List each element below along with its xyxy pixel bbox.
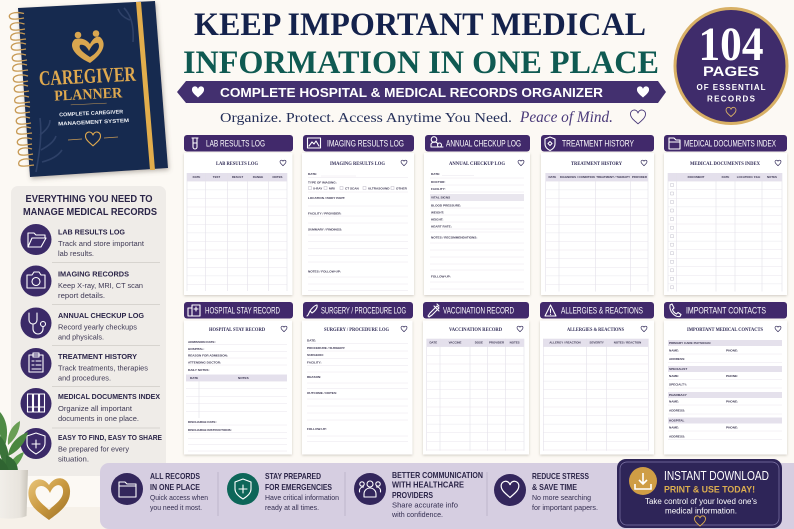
- form: FOLLOW-UP:: [431, 274, 451, 278]
- table: DIAGNOSIS / CONDITION: [560, 175, 595, 179]
- benefit: better communication: with confidence.: [391, 510, 443, 519]
- panel: treatment history: TREATMENT HISTORY: [571, 161, 622, 167]
- table: DATE: [429, 341, 437, 345]
- contact sections: PHONE:: [726, 400, 738, 404]
- icon: cover heart: [68, 132, 118, 146]
- item: medical documents index: documents in one place.: [58, 416, 139, 423]
- plant pot: [0, 470, 28, 519]
- table: RESULT: [232, 175, 243, 179]
- plant: [0, 412, 28, 519]
- panel heading: EVERYTHING YOU NEED TO: [26, 194, 153, 205]
- icon: scalpel: [307, 305, 317, 316]
- panel: allergies and reactions: ALLERGIES & REACTIONS: [561, 306, 643, 316]
- panel heading: [23, 194, 157, 218]
- benefit: all records: Quick access when: [150, 493, 208, 502]
- contact sections: NAME:: [669, 348, 679, 352]
- icon: phone: [670, 304, 681, 317]
- elastic band: [136, 2, 155, 170]
- form: [186, 340, 287, 451]
- form: OTHER: [396, 186, 408, 190]
- bottom benefits band: [100, 463, 794, 529]
- table: SEVERITY: [590, 341, 604, 345]
- form: BLOOD PRESSURE:: [431, 204, 461, 208]
- panel: annual checkup log: ANNUAL CHECKUP LOG: [446, 138, 521, 150]
- panel: treatment history: TREATMENT HISTORY: [562, 138, 634, 150]
- item: medical documents index: Organize all important: [58, 406, 132, 413]
- benefit: stay prepared: ready at all times.: [265, 503, 319, 512]
- table: ALLERGY / REACTION: [549, 341, 581, 345]
- badge: 104 pages: RECORDS: [707, 94, 756, 104]
- planner book: [9, 1, 168, 177]
- contact sections: PHONE:: [726, 348, 738, 352]
- form: [307, 338, 408, 442]
- panel: imaging results log: IMAGING RESULTS LOG: [330, 161, 386, 167]
- table: RANGE: [253, 175, 263, 179]
- panel: treatment history: [541, 135, 654, 295]
- panel: imaging results log: IMAGING RESULTS LOG: [327, 138, 404, 150]
- table: DATE: [722, 175, 729, 179]
- contact sections: PRIMARY CARE PHYSICIAN: [669, 341, 711, 345]
- form: [430, 172, 524, 289]
- panel: medical documents index: [664, 135, 787, 295]
- form: DISCHARGE DATE:: [188, 420, 217, 424]
- form: X-RAY: [313, 186, 323, 190]
- item: lab results log: Track and store important: [58, 241, 144, 248]
- benefit: reduce stress: REDUCE STRESS: [532, 472, 589, 481]
- item: easy to find: EASY TO FIND, EASY TO SHARE: [58, 433, 162, 442]
- form: DATE:: [308, 172, 317, 176]
- form: LOCATION / BODY PART:: [308, 196, 345, 200]
- icon: shield: [545, 137, 555, 150]
- title: [183, 7, 659, 81]
- table: LOCATION / FILE: [737, 175, 760, 179]
- panel: allergies and reactions: [540, 302, 654, 454]
- contact sections: ADDRESS:: [669, 434, 685, 438]
- instant download callout: Take control of your loved one's: [645, 497, 757, 506]
- tagline: [220, 109, 646, 126]
- table: DATE: [548, 175, 556, 179]
- item: annual checkup log: Record yearly checkups: [58, 324, 138, 332]
- icon: warning: [545, 305, 556, 316]
- form: SUMMARY / FINDINGS:: [308, 228, 342, 232]
- panel: surgery / procedure log: [302, 302, 413, 454]
- form: [308, 172, 408, 290]
- panel: lab results log: LAB RESULTS LOG: [206, 138, 265, 150]
- table: DOSE: [475, 341, 483, 345]
- table: PROVIDER: [489, 341, 505, 345]
- badge: 104 pages: [675, 8, 787, 124]
- title: INFORMATION IN ONE PLACE: [183, 45, 659, 81]
- table: [543, 339, 648, 451]
- form: DOCTOR:: [431, 180, 445, 184]
- panel: important contacts: IMPORTANT MEDICAL CONTACTS: [687, 327, 763, 333]
- panel: important contacts: [664, 302, 787, 454]
- icon: folder: [669, 138, 680, 149]
- icon: download: [629, 467, 657, 495]
- table: PROVIDER: [632, 175, 648, 179]
- panel: allergies and reactions: ALLERGIES & REACTIONS: [567, 327, 624, 333]
- panel: everything you need: [11, 186, 166, 476]
- contact sections: [668, 340, 782, 440]
- benefit: all records: you need it most.: [150, 503, 202, 512]
- form: PROCEDURE / SURGERY:: [307, 346, 345, 350]
- form: WEIGHT:: [431, 210, 444, 214]
- item: treatment history: Track treatments, therapies: [58, 366, 149, 372]
- benefit: better communication: BETTER COMMUNICATION: [392, 471, 483, 480]
- item: imaging records: report details.: [58, 293, 105, 300]
- tagline: Peace of Mind.: [519, 109, 613, 126]
- item: lab results log: lab results.: [58, 251, 94, 258]
- panel: annual checkup log: [424, 135, 530, 295]
- item: easy to find: Be prepared for every: [58, 446, 130, 454]
- table: [427, 339, 524, 451]
- item: annual checkup log: and physicals.: [58, 334, 104, 342]
- contact sections: HOSPITAL: [669, 419, 685, 423]
- item: medical documents index: MEDICAL DOCUMENTS INDEX: [58, 392, 160, 401]
- form: ADMISSION DATE:: [188, 340, 216, 344]
- table: [187, 173, 287, 291]
- contact sections: SPECIALTY:: [669, 382, 687, 386]
- item: easy to find: [20, 428, 162, 464]
- item: imaging records: [20, 266, 143, 300]
- form: ULTRASOUND: [368, 186, 390, 190]
- item: easy to find: situation.: [58, 456, 89, 464]
- form: HOSPITAL:: [188, 347, 204, 351]
- item: lab results log: [20, 224, 144, 258]
- benefit: better communication: [354, 471, 483, 519]
- item: lab results log: LAB RESULTS LOG: [58, 228, 125, 236]
- table: TEST: [213, 175, 220, 179]
- form: NOTES: [238, 376, 249, 380]
- form: REASON FOR ADMISSION:: [188, 354, 228, 358]
- benefit: all records: [111, 472, 208, 512]
- panel: important contacts: IMPORTANT CONTACTS: [686, 306, 766, 316]
- benefit: all records: IN ONE PLACE: [150, 483, 200, 492]
- gold heart ornament: [28, 478, 70, 520]
- tagline: Organize. Protect. Access Anytime You Need.: [220, 111, 512, 126]
- form: REASON:: [307, 375, 321, 379]
- benefit: better communication: Share accurate info: [392, 500, 458, 510]
- panel: lab results log: LAB RESULTS LOG: [216, 161, 259, 167]
- badge: 104 pages: PAGES: [703, 63, 759, 79]
- contact sections: ADDRESS:: [669, 408, 685, 412]
- form: DATE:: [431, 172, 440, 176]
- contact sections: NAME:: [669, 374, 679, 378]
- table: DATE: [193, 175, 200, 179]
- form: CT SCAN: [345, 186, 360, 190]
- panel: medical documents index: MEDICAL DOCUMENTS INDEX: [690, 161, 760, 167]
- panel heading: MANAGE MEDICAL RECORDS: [23, 207, 157, 218]
- table: [668, 173, 782, 292]
- panel: vaccination record: VACCINATION RECORD: [443, 306, 514, 316]
- benefit: reduce stress: & SAVE TIME: [532, 483, 577, 492]
- form: SURGEON:: [307, 353, 324, 357]
- benefit: all records: ALL RECORDS: [150, 472, 200, 481]
- table: NOTES: [767, 175, 777, 179]
- book title: PLANNER: [54, 85, 123, 105]
- panel: hospital stay record: HOSPITAL STAY RECORD: [205, 306, 280, 316]
- contact sections: ADDRESS:: [669, 357, 685, 361]
- icon: image scan: [308, 138, 320, 148]
- contact sections: PHONE:: [726, 374, 738, 378]
- form: ATTENDING DOCTOR:: [188, 360, 221, 364]
- form: MRI: [329, 186, 335, 190]
- form: HEART RATE:: [431, 224, 452, 228]
- instant download callout: [617, 459, 782, 528]
- icon: hospital: [188, 305, 200, 316]
- table: NOTES / REACTION: [614, 341, 641, 345]
- form: NOTES / FOLLOW-UP:: [308, 270, 341, 274]
- item: annual checkup log: [20, 308, 144, 342]
- benefit: reduce stress: [494, 472, 598, 512]
- icon: test tube: [192, 138, 198, 149]
- table: TREATMENT / THERAPY: [596, 175, 630, 179]
- panel: vaccination record: [423, 302, 529, 454]
- item: medical documents index: [20, 388, 160, 423]
- table: [546, 173, 648, 292]
- form: FACILITY / PROVIDER:: [308, 212, 341, 216]
- instant download callout: medical information.: [665, 506, 737, 516]
- table surface: [0, 507, 110, 529]
- floral cover decoration: [36, 8, 133, 172]
- benefit: stay prepared: Have critical information: [265, 493, 339, 502]
- contact sections: PHARMACY: [669, 393, 688, 397]
- benefit: better communication: WITH HEALTHCARE: [392, 480, 464, 490]
- benefit: reduce stress: No more searching: [532, 493, 591, 502]
- item: treatment history: [20, 348, 149, 382]
- benefit: better communication: PROVIDERS: [392, 491, 433, 500]
- contact sections: SPECIALIST: [669, 367, 687, 371]
- panel: imaging results log: [302, 135, 414, 295]
- contact sections: NAME:: [669, 426, 679, 430]
- form: FACILITY:: [307, 360, 322, 364]
- benefit: stay prepared: FOR EMERGENCIES: [265, 483, 332, 492]
- item: annual checkup log: ANNUAL CHECKUP LOG: [58, 311, 144, 320]
- form: DATE: [190, 376, 198, 380]
- book title: COMPLETE CAREGIVER: [59, 109, 124, 118]
- panel: hospital stay record: [184, 302, 293, 454]
- subtitle ribbon: COMPLETE HOSPITAL & MEDICAL RECORDS ORGANIZER: [220, 85, 604, 100]
- panel: vaccination record: VACCINATION RECORD: [449, 327, 502, 333]
- spiral binding: [9, 13, 34, 166]
- panel: annual checkup log: ANNUAL CHECKUP LOG: [449, 161, 506, 167]
- panel: lab results log: [184, 135, 293, 295]
- form: TYPE OF IMAGING:: [308, 180, 337, 184]
- benefit: reduce stress: for important papers.: [532, 503, 598, 512]
- form: DISCHARGE INSTRUCTIONS:: [188, 428, 232, 432]
- panel: surgery / procedure log: SURGERY / PROCEDURE LOG: [321, 306, 406, 316]
- panel: hospital stay record: HOSPITAL STAY RECORD: [209, 327, 265, 333]
- icon: caring figures heart: [72, 30, 104, 63]
- table: VACCINE: [449, 341, 461, 345]
- benefit: stay prepared: STAY PREPARED: [265, 472, 321, 481]
- item: imaging records: Keep X-ray, MRI, CT scan: [58, 283, 143, 290]
- table: DOCUMENT: [688, 175, 705, 179]
- title: KEEP IMPORTANT MEDICAL: [194, 7, 646, 43]
- contact sections: PHONE:: [726, 426, 738, 430]
- book title: MANAGEMENT SYSTEM: [58, 118, 129, 127]
- form: FACILITY:: [431, 187, 446, 191]
- instant download callout: INSTANT DOWNLOAD: [664, 469, 769, 483]
- contact sections: NAME:: [669, 400, 679, 404]
- panel: surgery / procedure log: SURGERY / PROCEDURE LOG: [324, 327, 390, 333]
- benefit: stay prepared: [227, 472, 339, 512]
- table: NOTES: [510, 341, 520, 345]
- instant download callout: PRINT & USE TODAY!: [664, 484, 755, 496]
- form: DAILY NOTES:: [188, 368, 210, 372]
- form: VITAL SIGNS: [431, 196, 450, 200]
- table: NOTES: [273, 175, 283, 179]
- item: imaging records: IMAGING RECORDS: [58, 270, 129, 278]
- book title: [38, 62, 139, 128]
- form: NOTES / RECOMMENDATIONS:: [431, 236, 477, 240]
- icon: syringe: [428, 304, 439, 317]
- form: HEIGHT:: [431, 218, 443, 222]
- item: treatment history: and procedures.: [58, 376, 111, 382]
- form: DATE:: [307, 338, 316, 342]
- form: FOLLOW-UP:: [307, 427, 327, 431]
- book title: CAREGIVER: [38, 62, 137, 90]
- subtitle ribbon: [177, 81, 666, 103]
- badge: 104 pages: 104: [698, 18, 764, 71]
- icon: person: [431, 142, 443, 147]
- item: treatment history: TREATMENT HISTORY: [58, 352, 137, 361]
- form: OUTCOME / NOTES:: [307, 391, 337, 395]
- badge: 104 pages: OF ESSENTIAL: [696, 83, 766, 92]
